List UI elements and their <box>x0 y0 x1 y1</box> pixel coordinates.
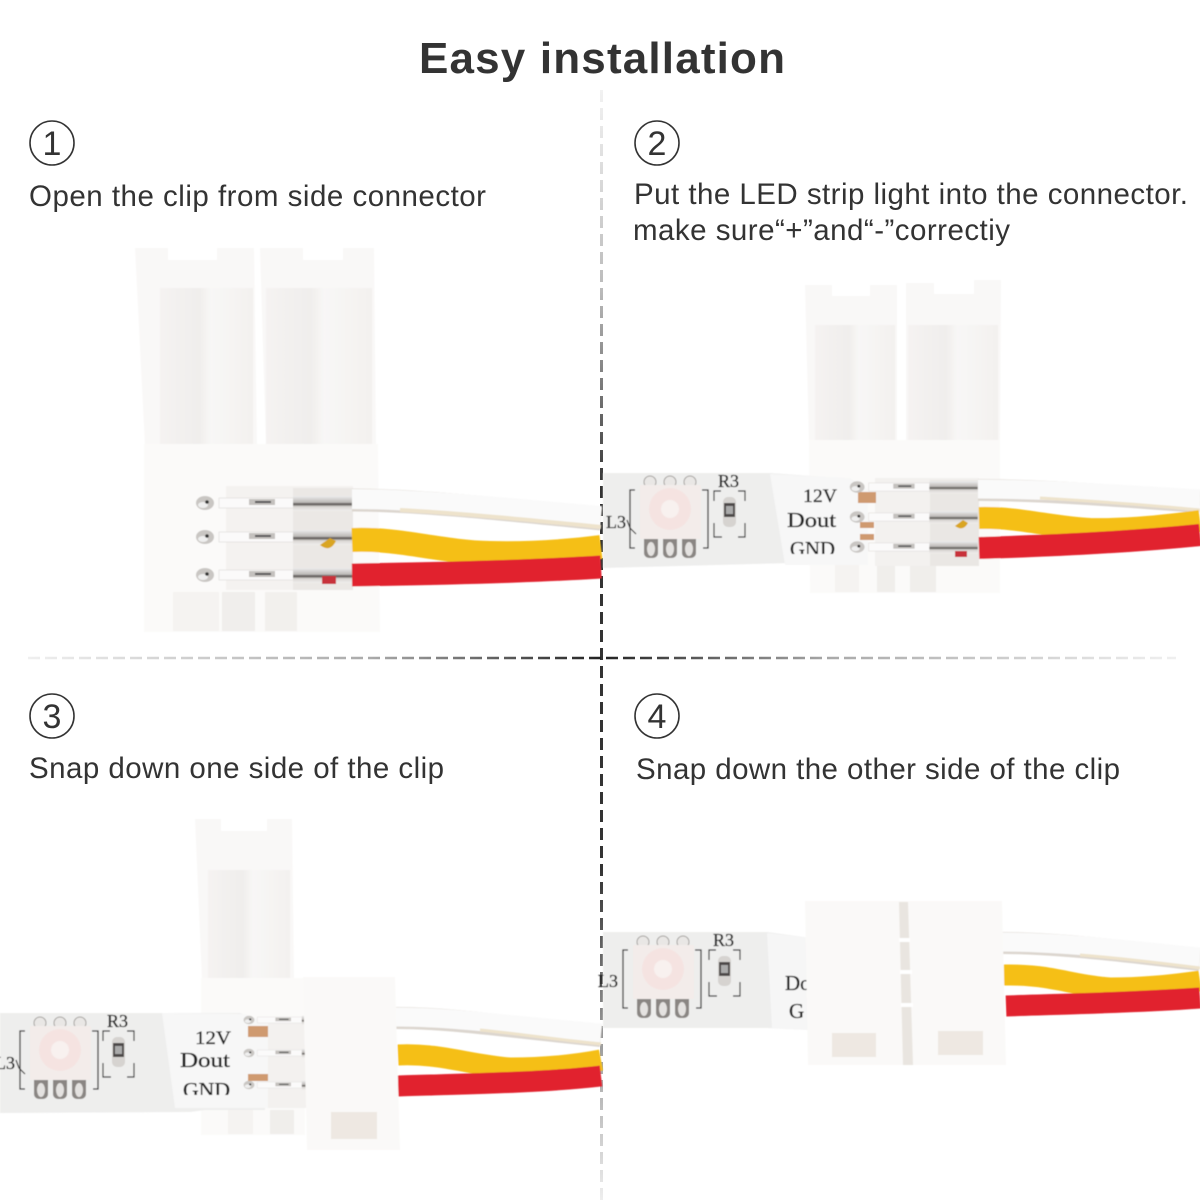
metal pins <box>196 496 352 584</box>
LED strip: R3 <box>713 930 734 950</box>
LED strip: L3 <box>606 512 626 532</box>
connector clip with LED strip and wires <box>603 280 1200 593</box>
LED strip: 12V <box>195 1028 231 1049</box>
metal pins <box>244 1016 337 1108</box>
LED strip: G <box>789 999 804 1023</box>
panel: step 2 <box>603 121 1200 593</box>
LED strip: R3 <box>718 471 739 491</box>
LED strip: GND <box>790 537 835 561</box>
LED strip <box>0 1011 270 1113</box>
LED strip: Do <box>785 971 811 995</box>
wires <box>396 1017 601 1086</box>
step number 2 <box>635 121 679 165</box>
metal pins <box>850 478 979 566</box>
step number 2: 2 <box>648 125 666 163</box>
LED strip <box>603 471 868 568</box>
clip body <box>805 901 1006 1065</box>
vertical dashed divider <box>600 90 603 1200</box>
step 4 instruction: Snap down the other side of the clip <box>636 753 1120 786</box>
closed clip with LED strip and wires <box>598 901 1200 1065</box>
panel: step 4 <box>598 694 1200 1065</box>
LED strip: Dout <box>180 1048 230 1072</box>
clip body <box>135 248 380 632</box>
step number 1: 1 <box>43 125 61 163</box>
half-closed clip with LED strip and wires <box>0 819 601 1150</box>
step 3 instruction: Snap down one side of the clip <box>29 752 444 785</box>
LED strip: L3 <box>598 971 618 991</box>
LED strip: Dout <box>787 508 836 532</box>
step number 1 <box>30 121 74 165</box>
wires <box>1002 942 1200 1006</box>
clip body <box>805 280 1001 593</box>
step 2 instruction <box>633 178 1188 247</box>
step number 3: 3 <box>43 698 61 736</box>
panel: step 1 <box>29 121 601 632</box>
step number 4: 4 <box>648 698 666 736</box>
step 2 instruction: make sure“+”and“-”correctiy <box>633 214 1010 247</box>
wires <box>352 499 601 575</box>
step number 4 <box>635 694 679 738</box>
panel: step 3 <box>0 694 601 1150</box>
open clip half <box>195 819 305 1135</box>
open connector clip with wires <box>135 248 601 632</box>
wires <box>978 489 1200 548</box>
horizontal dashed divider <box>28 657 1176 659</box>
step 1 instruction: Open the clip from side connector <box>29 180 486 213</box>
title: Easy installation <box>419 34 785 83</box>
LED strip: GND <box>183 1078 230 1102</box>
LED strip: R3 <box>107 1011 128 1031</box>
step number 3 <box>30 694 74 738</box>
LED strip <box>598 930 811 1030</box>
step 2 instruction: Put the LED strip light into the connector. <box>634 178 1188 211</box>
closed clip half <box>303 977 400 1150</box>
LED strip: 12V <box>803 486 837 507</box>
